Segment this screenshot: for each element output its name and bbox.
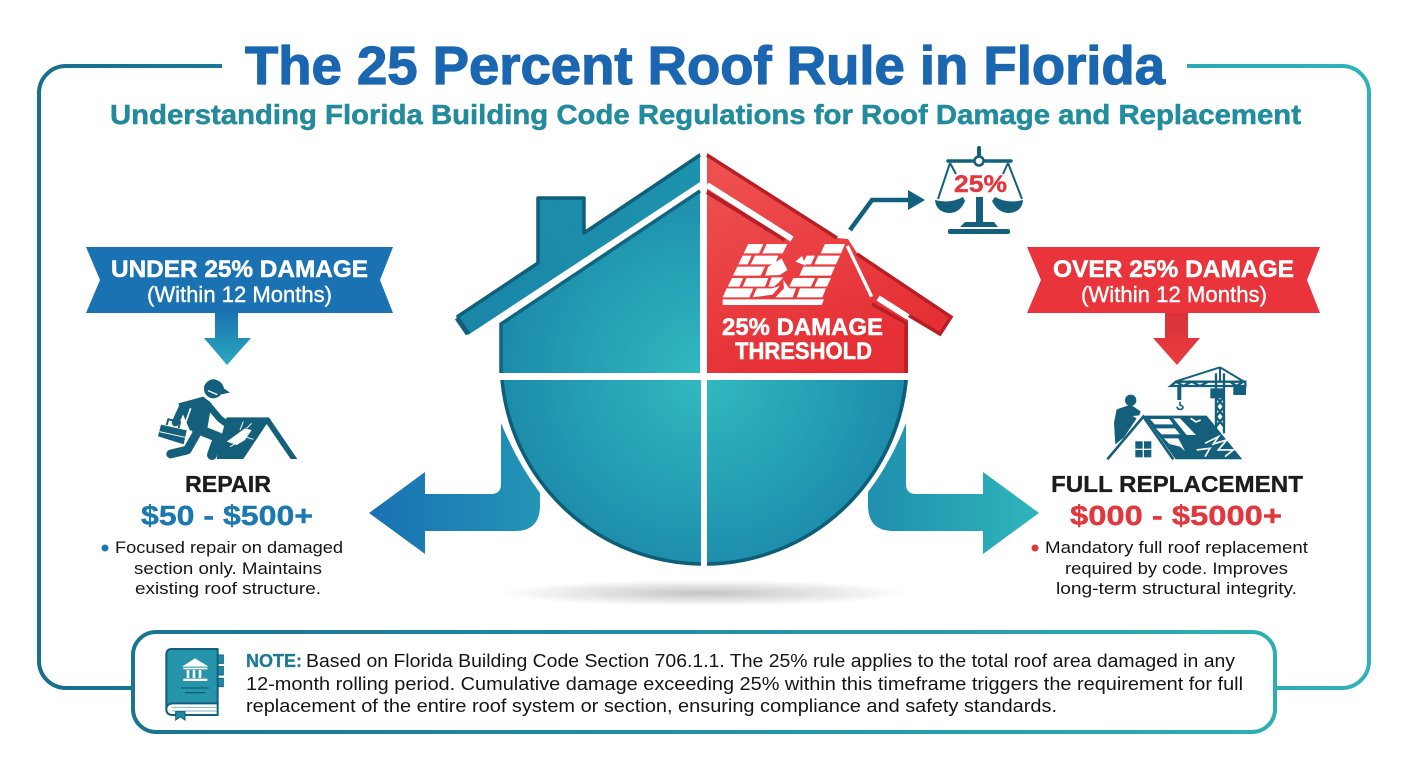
icon: roofer repairing roof: [157, 379, 297, 459]
text block: note: 12-month rolling period. Cumulative damage exceeding 25% within this timeframe triggers the requirement for full: [246, 674, 1243, 694]
panel: under 25% repair: [86, 247, 393, 598]
outer frame: [39, 66, 1369, 688]
house: lower left quadrant: [500, 380, 701, 566]
threshold label: THRESHOLD: [735, 338, 872, 365]
text block: repair description: section only. Maintains: [134, 559, 322, 578]
text block: replacement description: long-term structural integrity.: [1056, 579, 1297, 598]
text block: repair description: Focused repair on damaged: [115, 538, 343, 557]
arrow: left to repair: [369, 423, 540, 554]
heading: repair: REPAIR: [185, 471, 271, 497]
text block: note: replacement of the entire roof system or section, ensuring compliance and safety standards.: [246, 696, 1057, 716]
banner: under 25% damage: UNDER 25% DAMAGE: [111, 256, 368, 283]
price: repair: $50 - $500+: [141, 500, 313, 531]
price: full replacement: $000 - $5000+: [1070, 500, 1282, 531]
central house diagram: [456, 153, 952, 566]
arrow: down to repair: [204, 313, 251, 365]
panel: note: [133, 632, 1275, 732]
banner: over 25% damage: [1027, 247, 1320, 313]
icon: damaged brick roof: [723, 244, 872, 305]
banner: under 25% damage: (Within 12 Months): [147, 282, 332, 307]
house: upper right red quadrant: [707, 153, 952, 373]
text block: replacement description: Mandatory full roof replacement: [1045, 538, 1308, 557]
subtitle: Understanding Florida Building Code Regulations for Roof Damage and Replacement: [110, 99, 1301, 130]
icon: roofer and crane on new roof: [1107, 367, 1246, 459]
house: left roof and chimney: [456, 153, 700, 335]
panel: over 25% full replacement: [1027, 247, 1320, 598]
text block: note: [246, 651, 1243, 716]
text block: repair description: [102, 538, 343, 598]
arrow: right to replacement: [868, 423, 1039, 554]
house: upper left quadrant: [500, 190, 700, 373]
icon: scale of justice with 25%: 25%: [954, 171, 1007, 198]
arrow: down to replacement: [1153, 313, 1200, 365]
threshold label: 25% DAMAGE: [722, 314, 883, 341]
text block: note: Based on Florida Building Code Section 706.1.1. The 25% rule applies to the total roof area damaged in any: [306, 651, 1235, 671]
text block: repair description: existing roof structure.: [135, 579, 321, 598]
title: The 25 Percent Roof Rule in Florida: [245, 36, 1166, 96]
arrow: pointer to scale: [850, 190, 925, 230]
banner: over 25% damage: (Within 12 Months): [1081, 282, 1267, 307]
house: lower right quadrant: [707, 380, 908, 566]
text block: note: NOTE:: [246, 651, 302, 671]
text block: replacement description: [1032, 538, 1308, 598]
threshold label: [722, 314, 883, 365]
heading: full replacement: FULL REPLACEMENT: [1051, 471, 1303, 497]
text block: replacement description: required by code. Improves: [1065, 559, 1288, 578]
banner: under 25% damage: [86, 247, 393, 313]
icon: scale of justice with 25%: [935, 148, 1023, 234]
icon: code book: [166, 649, 223, 720]
banner: over 25% damage: OVER 25% DAMAGE: [1053, 256, 1294, 283]
ground shadow: [499, 580, 909, 606]
